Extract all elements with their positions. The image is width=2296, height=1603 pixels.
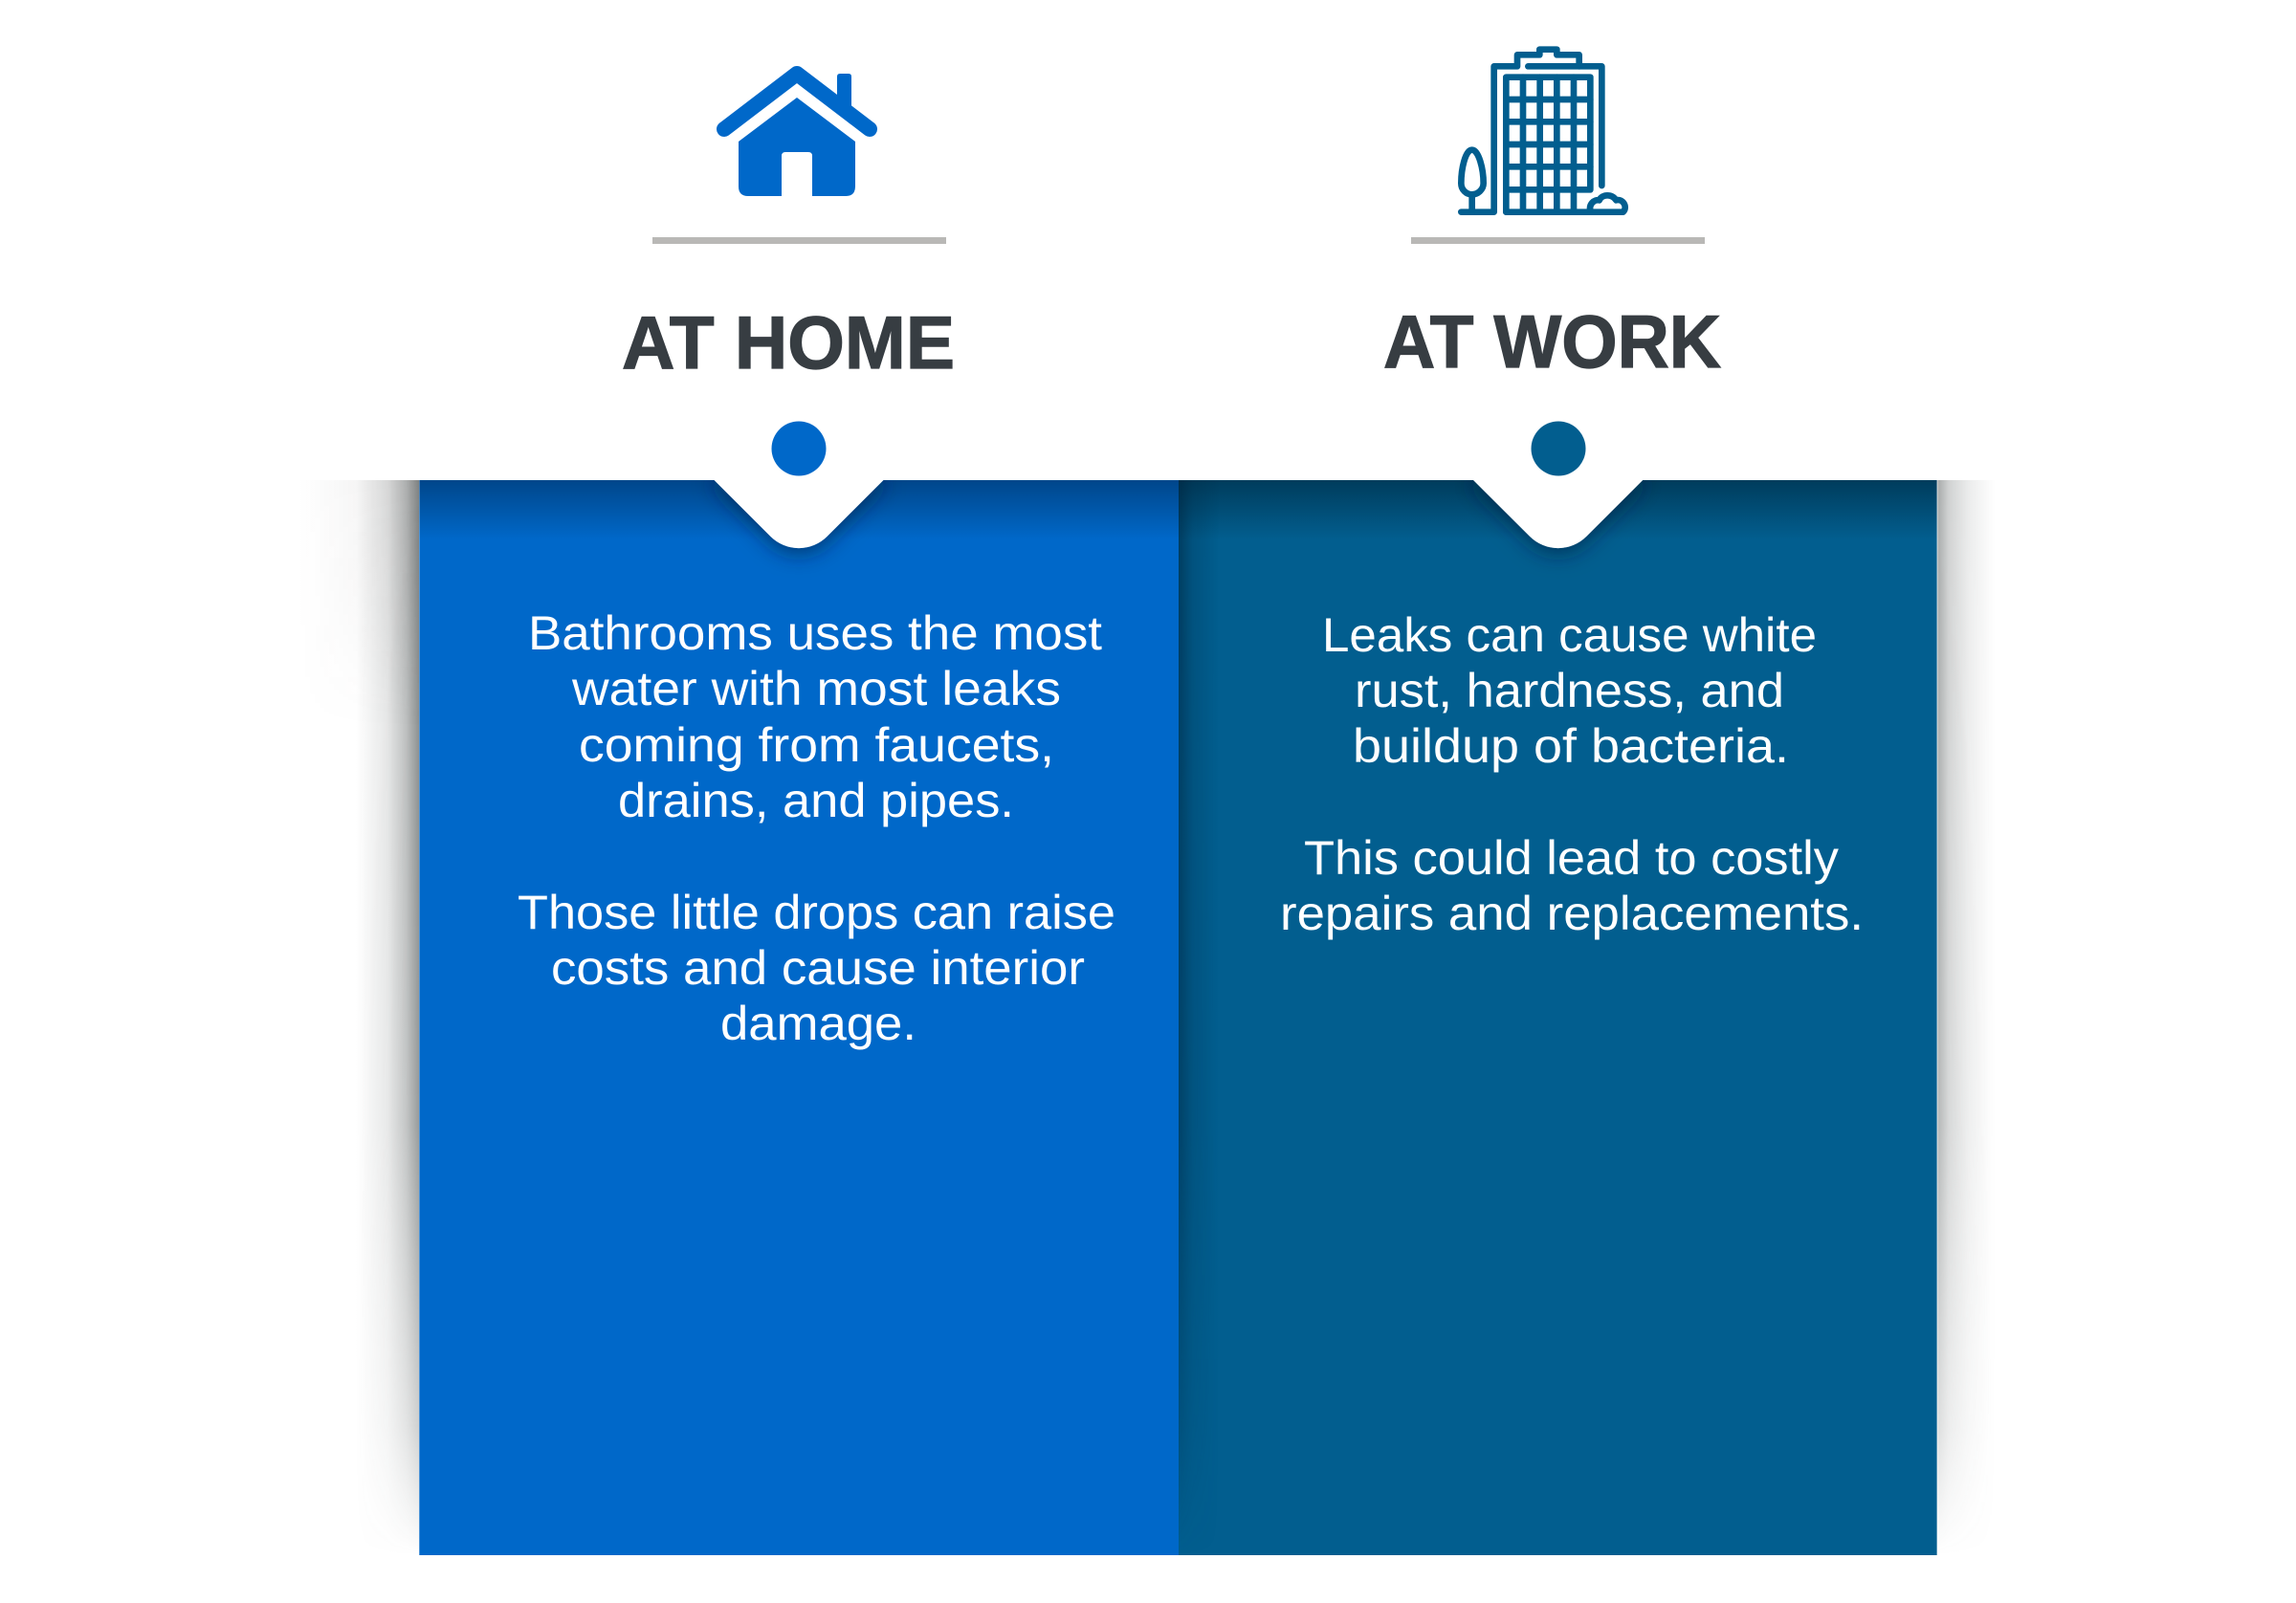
notch: at home <box>714 473 884 548</box>
text block: at work: rust, hardness, and <box>1355 664 1784 717</box>
panel: at home <box>419 480 1179 1555</box>
text block: at home: damage. <box>720 997 916 1050</box>
text block: at home: Those little drops can raise <box>518 886 1115 939</box>
text block: at work: Leaks can cause white <box>1322 608 1817 662</box>
text block: at home: coming from faucets, <box>579 718 1054 772</box>
title: at home: AT HOME <box>622 300 955 384</box>
text block: at home: drains, and pipes. <box>618 774 1014 827</box>
marker dot: at home <box>771 421 827 476</box>
icon: house <box>724 74 870 196</box>
icon: office building <box>1461 50 1625 212</box>
text block: at work <box>1280 608 1864 940</box>
text block: at home: water with most leaks <box>571 662 1061 715</box>
panel shadows <box>298 480 1995 1555</box>
text block: at home: Bathrooms uses the most <box>528 606 1102 660</box>
text block: at home: costs and cause interior <box>551 941 1085 995</box>
marker dot: at work <box>1531 421 1586 476</box>
text block: at work: buildup of bacteria. <box>1353 719 1789 773</box>
divider: at home <box>652 237 946 244</box>
title: at work: AT WORK <box>1383 299 1721 384</box>
text block: at work: This could lead to costly <box>1304 831 1839 885</box>
panel: at work <box>1179 480 1938 1555</box>
text block: at work: repairs and replacements. <box>1280 887 1864 940</box>
divider: at work <box>1411 237 1705 244</box>
header background <box>0 0 2296 480</box>
notch: at work <box>1473 473 1643 548</box>
text block: at home <box>518 606 1115 1050</box>
